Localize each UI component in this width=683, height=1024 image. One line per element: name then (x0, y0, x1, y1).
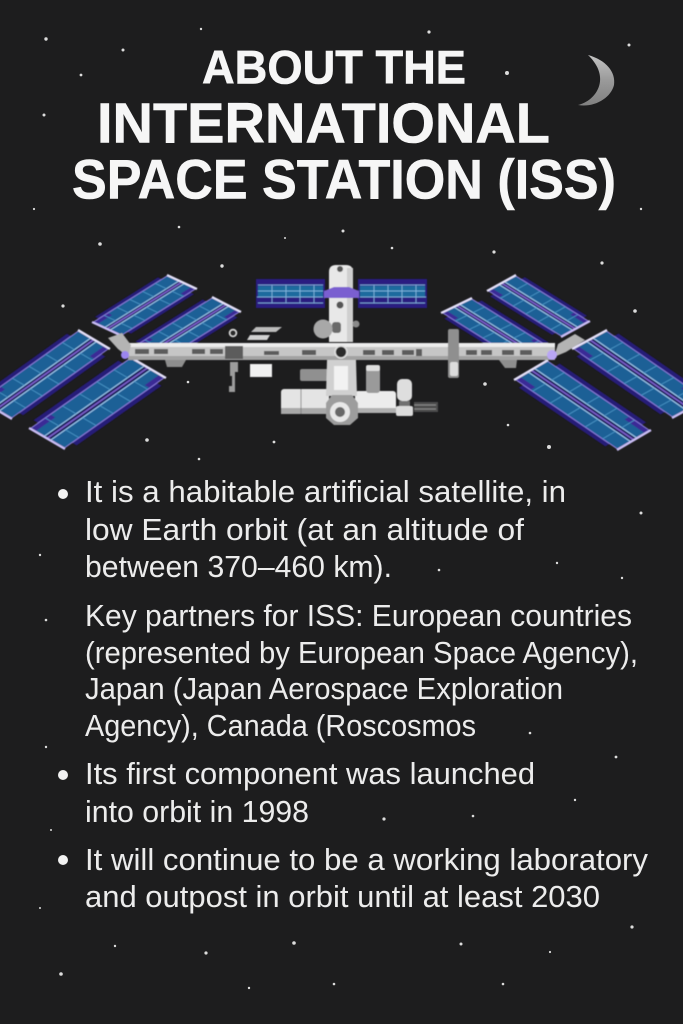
solar array: lower right inner (511, 358, 654, 452)
solar array: upper left inner (136, 296, 242, 344)
text: key partners: (represented by European Space Agency), (85, 636, 638, 670)
bullet: first component: into orbit in 1998 (85, 795, 309, 829)
bullet list (58, 475, 649, 914)
bullet: until 2030: It will continue to be a working laboratory (85, 843, 649, 877)
icon: crescent moon (578, 55, 614, 106)
title (72, 40, 616, 210)
bullet: first component (58, 757, 535, 829)
lower modules (281, 346, 438, 425)
solar array: lower right outer (568, 328, 683, 420)
bullet: first component: Its first component was launched (85, 757, 535, 791)
bullet: orbit: low Earth orbit (at an altitude of (85, 513, 525, 547)
solar array: lower left inner (25, 355, 170, 451)
text: key partners: Japan (Japan Aerospace Exploration (85, 672, 563, 706)
solar array: upper right outer (484, 273, 593, 339)
title: INTERNATIONAL (97, 92, 550, 156)
text: key partners: Key partners for ISS: European countries (85, 599, 632, 633)
text: key partners: Agency), Canada (Roscosmos (85, 709, 476, 743)
bullet: until 2030: and outpost in orbit until at least 2030 (85, 880, 600, 914)
bullet: until 2030 (58, 843, 649, 914)
text: key partners (85, 599, 638, 743)
title: SPACE STATION (ISS) (72, 148, 616, 210)
top small solar arrays (256, 279, 427, 308)
solar array: upper left outer (89, 274, 200, 337)
illustration: International Space Station (0, 265, 683, 452)
bullet: orbit (58, 475, 566, 584)
vertical node module (314, 265, 360, 342)
bullet: orbit: It is a habitable artificial satellite, in (85, 475, 566, 509)
title: ABOUT THE (202, 40, 466, 94)
truss attachments (229, 327, 459, 392)
bullet: orbit: between 370–460 km). (85, 550, 392, 584)
solar array: upper right inner (440, 296, 549, 344)
main truss (108, 333, 585, 368)
solar array: lower left outer (0, 328, 113, 421)
